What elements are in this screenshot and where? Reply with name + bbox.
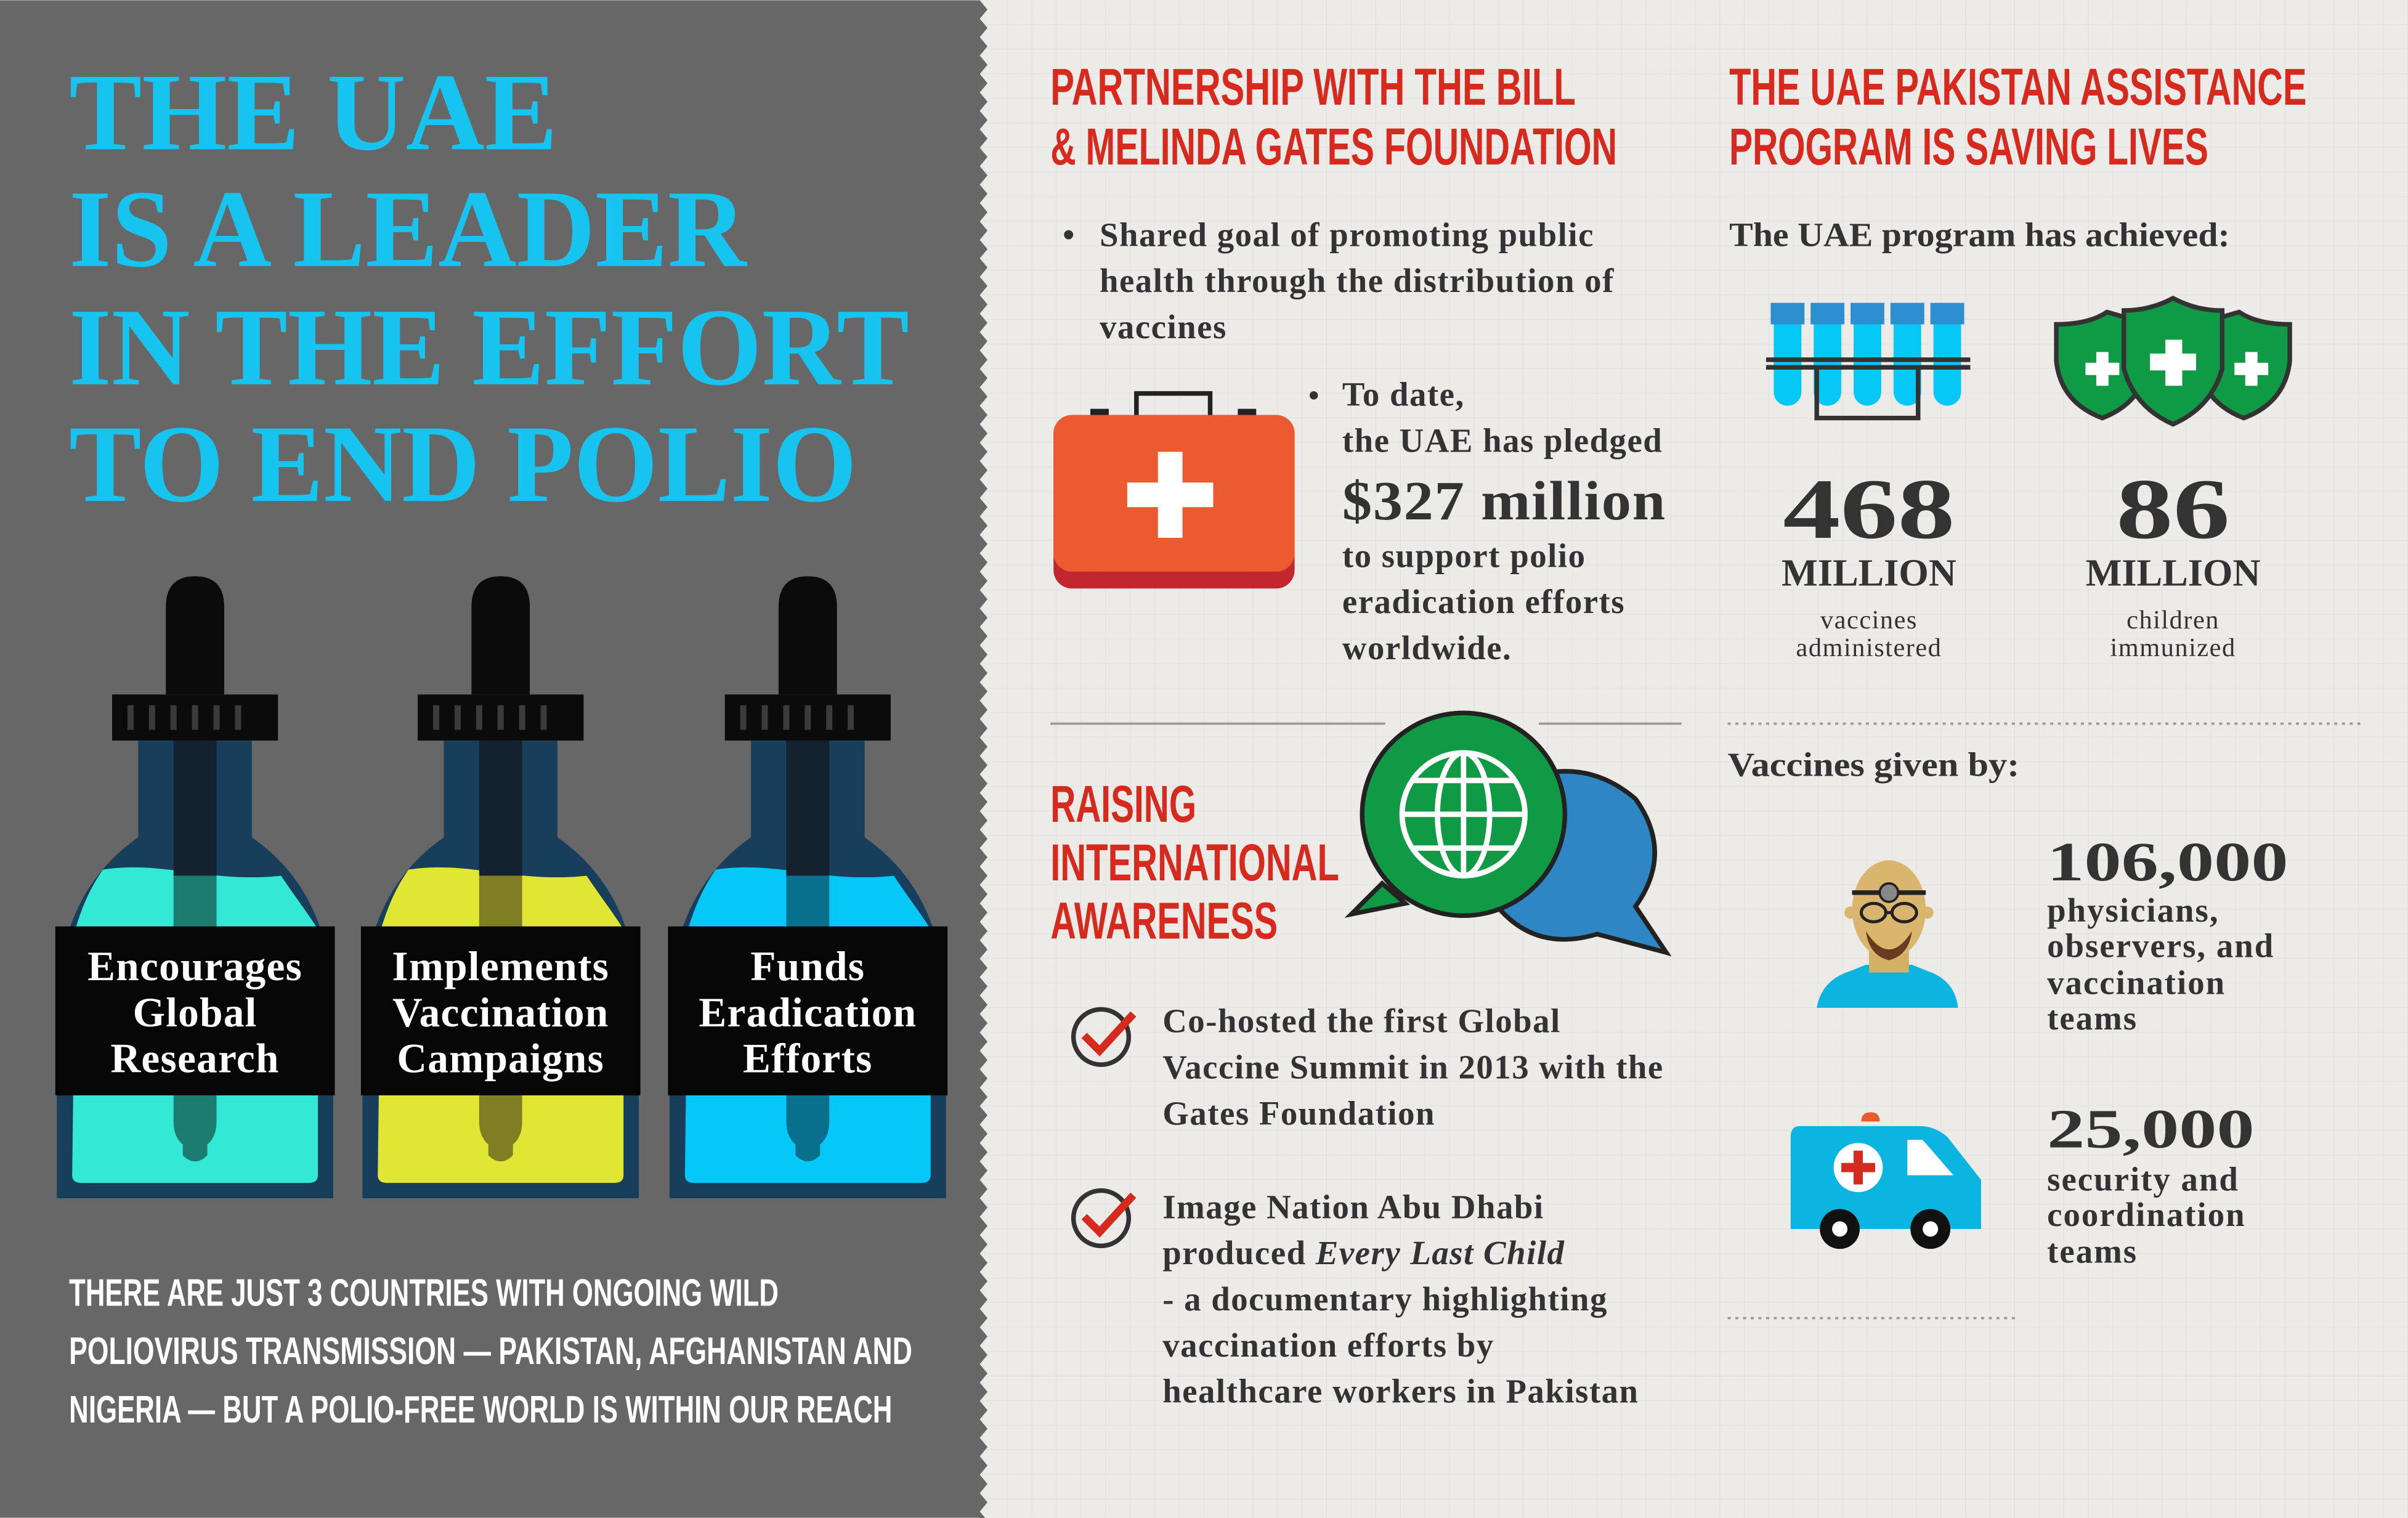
title: IS A LEADER (69, 168, 748, 290)
icon: medical kit (1053, 394, 1295, 588)
stat: 106,000 (2047, 832, 2288, 1037)
stat: 468 million: vaccines (1820, 606, 1918, 635)
bottle: research: Encourages (87, 943, 302, 989)
heading: partnership (1050, 57, 1617, 176)
title: THE UAE (69, 51, 557, 173)
text: countries note: THERE ARE JUST 3 COUNTRIES WITH ONGOING WILD (69, 1272, 779, 1315)
bottle: funds: Funds (750, 943, 865, 989)
list: awareness items: Gates Foundation (1162, 1094, 1435, 1132)
text: vaccines given by: Vaccines given by: (1728, 745, 2019, 783)
icon: ambulance (1791, 1112, 1981, 1249)
bottle: research: Global (133, 989, 257, 1036)
stat: 106,000: observers, and (2047, 927, 2274, 965)
text: pledged: the UAE has pledged (1342, 421, 1663, 459)
stat: 86 million: 86 (2116, 462, 2230, 557)
text: countries note (69, 1272, 912, 1431)
bottle: funds: Efforts (743, 1036, 873, 1082)
stat: 86 million: children (2126, 606, 2219, 635)
text: pledged: • (1308, 379, 1320, 413)
text: shared goal (1063, 216, 1615, 346)
text: pledged: eradication efforts (1342, 583, 1625, 620)
heading: pakistan program (1729, 57, 2306, 176)
list: awareness items: produced Every Last Child (1162, 1234, 1565, 1272)
stat: 25,000: teams (2047, 1233, 2138, 1270)
stat: 25,000: coordination (2047, 1196, 2246, 1233)
text: countries note: POLIOVIRUS TRANSMISSION — PAKISTAN, AFGHANISTAN AND (69, 1330, 912, 1373)
stat: 86 million: immunized (2110, 633, 2236, 662)
text: pledged: To date, (1342, 376, 1465, 413)
list: awareness items: Co-hosted the first Global (1162, 1002, 1561, 1040)
icon: speech bubbles globe (1352, 713, 1666, 952)
text: pledged: to support polio (1342, 537, 1586, 574)
stat: 86 million (2086, 462, 2261, 662)
icon: shields (2056, 298, 2290, 424)
stat: 468 million: 468 (1783, 462, 1955, 557)
bottle: funds: Eradication (699, 989, 917, 1036)
icon: doctor (1817, 861, 1958, 1008)
text: countries note: NIGERIA — BUT A POLIO-FREE WORLD IS WITHIN OUR REACH (69, 1389, 892, 1431)
title: IN THE EFFORT (69, 286, 909, 408)
stat: 106,000: vaccination (2047, 964, 2226, 1001)
text: shared goal: vaccines (1100, 308, 1227, 346)
stat: 106,000: physicians, (2047, 891, 2219, 929)
list: awareness items: Image Nation Abu Dhabi (1162, 1188, 1544, 1225)
heading: raising awareness: RAISING (1050, 774, 1196, 833)
heading: raising awareness: AWARENESS (1050, 891, 1278, 950)
panel: left gray (0, 0, 987, 1518)
list: awareness items: healthcare workers in Pakistan (1162, 1373, 1639, 1410)
list: awareness items: vaccination efforts by (1162, 1326, 1494, 1364)
text: achieved: The UAE program has achieved: (1729, 216, 2230, 253)
heading: partnership: PARTNERSHIP WITH THE BILL (1050, 57, 1576, 116)
bottle: research: Research (111, 1036, 280, 1082)
bottle: research (55, 576, 334, 1198)
bottle: vaccination: Vaccination (392, 989, 609, 1036)
bottle: vaccination: Campaigns (397, 1036, 604, 1082)
list: awareness items: Vaccine Summit in 2013 with the (1162, 1049, 1664, 1086)
text: pledged: $327 million (1342, 471, 1666, 532)
bottle: funds (668, 576, 947, 1198)
icon: test tubes (1766, 303, 1970, 418)
text: shared goal: health through the distribution of (1100, 262, 1615, 299)
text: shared goal: Shared goal of promoting public (1100, 216, 1594, 253)
text: shared goal: • (1063, 216, 1076, 253)
stat: 86 million: MILLION (2086, 551, 2261, 594)
stat: 25,000 (2047, 1099, 2255, 1270)
bottle: vaccination: Implements (392, 943, 609, 989)
heading: raising awareness (1050, 774, 1339, 950)
stat: 25,000: security and (2047, 1161, 2239, 1198)
stat: 468 million: MILLION (1782, 551, 1956, 594)
bottle: vaccination (361, 576, 641, 1198)
icon: check 1 (1074, 1009, 1133, 1065)
list: awareness items (1074, 1002, 1664, 1410)
text: pledged (1308, 376, 1666, 667)
text: pledged: worldwide. (1342, 629, 1512, 667)
title: TO END POLIO (69, 402, 857, 525)
heading: partnership: & MELINDA GATES FOUNDATION (1050, 117, 1617, 176)
stat: 106,000: 106,000 (2047, 832, 2288, 893)
heading: raising awareness: INTERNATIONAL (1050, 833, 1339, 891)
stat: 468 million (1782, 462, 1956, 662)
title (69, 51, 909, 525)
stat: 468 million: administered (1796, 633, 1942, 662)
stat: 25,000: 25,000 (2047, 1099, 2255, 1160)
stat: 106,000: teams (2047, 999, 2138, 1037)
list: awareness items: - a documentary highlighting (1162, 1280, 1608, 1318)
